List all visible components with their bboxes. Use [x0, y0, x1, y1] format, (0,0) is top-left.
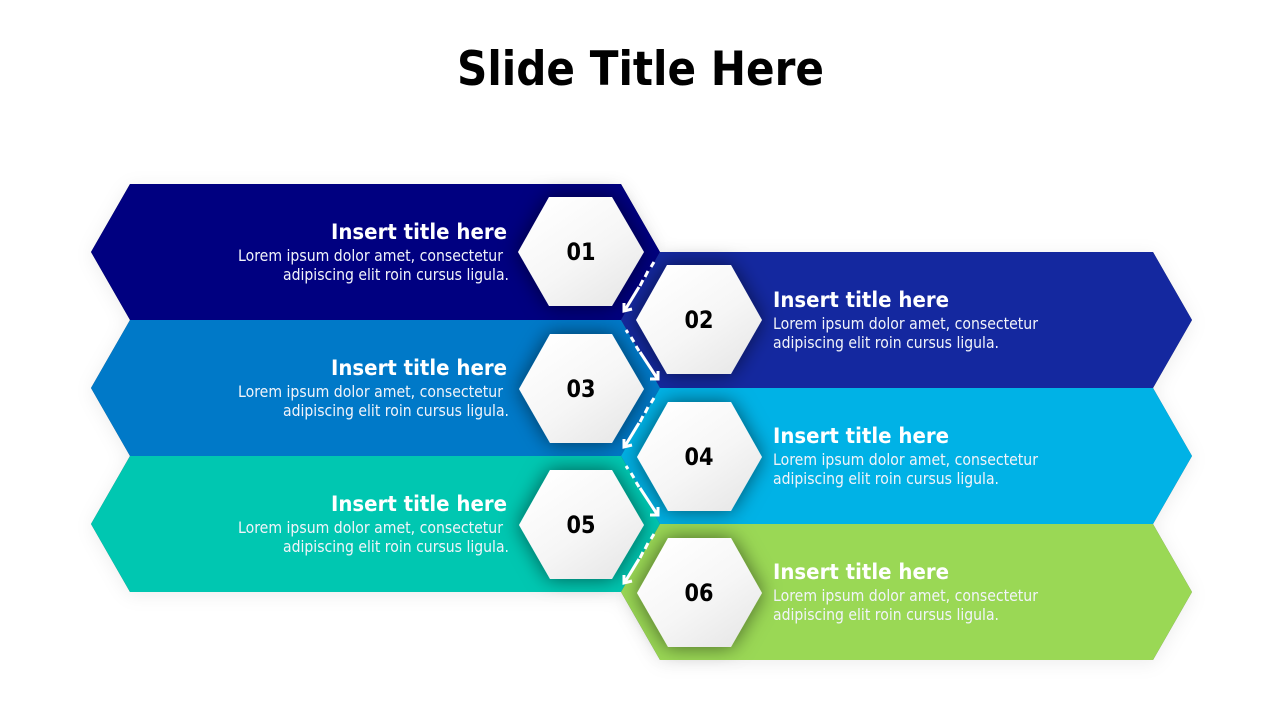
hexagon 06: 06 [684, 579, 714, 607]
panel: step 05 [91, 456, 660, 592]
body text 02: adipiscing elit roin cursus ligula. [773, 333, 999, 352]
hexagon 04 [637, 402, 762, 511]
hexagon 06 [637, 538, 762, 647]
body text 03 [238, 382, 509, 420]
hexagon 04: 04 [684, 443, 714, 471]
hexagon 05: 05 [566, 511, 596, 539]
hexagon 01: 01 [566, 238, 596, 266]
hexagon 03 [519, 334, 644, 443]
arrow: 04 to 05 [626, 466, 658, 515]
banner 05 [91, 456, 660, 592]
hexagon 02 [636, 265, 762, 374]
heading 02: Insert title here [773, 288, 949, 312]
hexagon 01 [518, 197, 644, 306]
panel: step 04 [621, 388, 1192, 524]
panel: step 01 [91, 184, 660, 320]
banner 06 [621, 524, 1192, 660]
body text 03: adipiscing elit roin cursus ligula. [283, 401, 509, 420]
banner 01 [91, 184, 660, 320]
arrow: 03 to 04 [624, 398, 654, 447]
heading 03: Insert title here [331, 356, 507, 380]
body text 03: Lorem ipsum dolor amet, consectetur [238, 382, 503, 401]
body text 01: Lorem ipsum dolor amet, consectetur [238, 246, 503, 265]
heading 01: Insert title here [331, 220, 507, 244]
body text 02: Lorem ipsum dolor amet, consectetur [773, 314, 1038, 333]
body text 04: Lorem ipsum dolor amet, consectetur [773, 450, 1038, 469]
banner 03 [91, 320, 660, 456]
body text 04: adipiscing elit roin cursus ligula. [773, 469, 999, 488]
body text 06: adipiscing elit roin cursus ligula. [773, 605, 999, 624]
panel: step 03 [91, 320, 660, 456]
panel: step 06 [621, 524, 1192, 660]
arrow: 02 to 03 [626, 330, 658, 379]
banner 04 [621, 388, 1192, 524]
heading 04: Insert title here [773, 424, 949, 448]
hexagon 05 [519, 470, 644, 579]
arrow: 01 to 02 [624, 262, 654, 311]
body text 05: Lorem ipsum dolor amet, consectetur [238, 518, 503, 537]
panel: step 02 [621, 252, 1192, 388]
body text 06: Lorem ipsum dolor amet, consectetur [773, 586, 1038, 605]
heading 05: Insert title here [331, 492, 507, 516]
body text 02 [773, 314, 1038, 352]
body text 06 [773, 586, 1038, 624]
body text 05 [238, 518, 509, 556]
banner 02 [621, 252, 1192, 388]
title: Slide Title Here [457, 42, 824, 97]
arrow: 05 to 06 [624, 534, 654, 583]
hexagon 02: 02 [684, 306, 714, 334]
body text 05: adipiscing elit roin cursus ligula. [283, 537, 509, 556]
body text 01 [238, 246, 509, 284]
body text 04 [773, 450, 1038, 488]
body text 01: adipiscing elit roin cursus ligula. [283, 265, 509, 284]
heading 06: Insert title here [773, 560, 949, 584]
hexagon 03: 03 [566, 375, 596, 403]
